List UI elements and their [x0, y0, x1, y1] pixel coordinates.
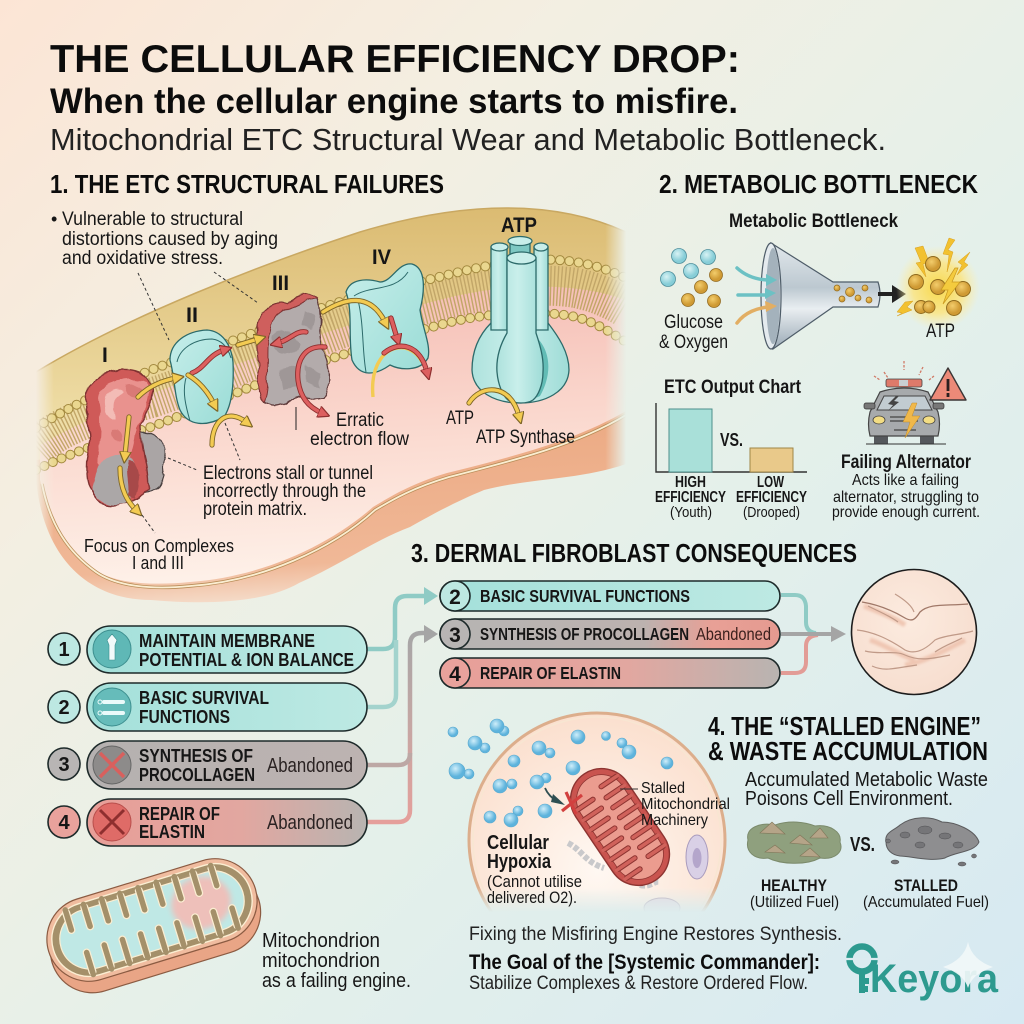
- bar 2: [440, 581, 780, 611]
- leader line: [620, 788, 638, 790]
- label: ATP: ATP: [446, 408, 474, 429]
- icon: wrinkled skin circle: [852, 570, 976, 694]
- arrow: IV red short: [391, 318, 397, 338]
- title: When the cellular engine starts to misfire.: [50, 82, 738, 121]
- label: stalled machinery: Mitochondrial: [641, 796, 730, 813]
- panel: survival priority list: [48, 626, 367, 846]
- panel: failing alternator: [832, 361, 980, 521]
- arrow: I tunnel: [120, 468, 136, 510]
- heading: section 2: 2. METABOLIC BOTTLENECK: [659, 171, 979, 199]
- heading: section 3: 3. DERMAL FIBROBLAST CONSEQUENCES: [411, 540, 857, 568]
- item 2: 2: [58, 697, 70, 719]
- arrow: III erratic: [298, 347, 325, 413]
- item 1: MAINTAIN MEMBRANE: [139, 630, 315, 651]
- text: accumulated waste: Poisons Cell Environment.: [745, 788, 953, 810]
- label: focus on complexes: [84, 536, 234, 573]
- label: erratic electron flow: electron flow: [310, 429, 409, 450]
- label: electrons stall: incorrectly through the: [203, 481, 366, 502]
- protein: Complex II: [170, 330, 233, 423]
- bar 4: REPAIR OF ELASTIN: [480, 663, 621, 683]
- heading: section 1: 1. THE ETC STRUCTURAL FAILURES: [50, 171, 444, 199]
- bar 3: 3: [449, 624, 461, 647]
- protein: Complex I: [86, 370, 167, 506]
- item 3: Abandoned: [267, 755, 353, 777]
- label: healthy: HEALTHY: [761, 876, 828, 895]
- label: ATP synthase: ATP Synthase: [476, 427, 575, 448]
- label: complex III: III: [272, 272, 289, 295]
- illustration: mitochondrion: [36, 848, 271, 1003]
- label: vulnerable text block: Vulnerable to structural: [62, 209, 243, 230]
- title: Mitochondrial ETC Structural Wear and Metabolic Bottleneck.: [50, 122, 886, 157]
- label: complex IV: IV: [372, 246, 391, 269]
- label: vulnerable text block: and oxidative stress.: [62, 248, 223, 269]
- icon: stalled waste: [886, 818, 979, 866]
- logo: Keyora: Keyora: [870, 957, 999, 1001]
- cell body: [468, 712, 726, 910]
- label: electrons stall: protein matrix.: [203, 499, 307, 520]
- text block: provide enough current.: [832, 504, 980, 521]
- label: cellular hypoxia: (Cannot utilise: [487, 873, 582, 891]
- label: erratic electron flow: [310, 410, 409, 450]
- bar 2: 2: [449, 586, 461, 609]
- item 3: [48, 741, 367, 789]
- bar chart: [656, 403, 807, 472]
- item 2: FUNCTIONS: [139, 706, 230, 727]
- label: vulnerable text block: •: [51, 209, 57, 229]
- panel: metabolic bottleneck funnel: [659, 211, 980, 353]
- label: low efficiency: (Drooped): [743, 505, 800, 521]
- ATP burst: [896, 238, 980, 330]
- item 4: REPAIR OF: [139, 803, 220, 824]
- label: healthy: [750, 876, 839, 911]
- panel: ETC output chart: [655, 377, 808, 521]
- protein: Complex III: [257, 294, 329, 430]
- footer text block: Stabilize Complexes & Restore Ordered Flow.: [469, 973, 808, 994]
- label: electrons stall: Electrons stall or tunnel: [203, 463, 373, 484]
- label: cellular hypoxia: delivered O2).: [487, 889, 577, 907]
- bar 4: [440, 658, 780, 688]
- icon: healthy fuel: [747, 822, 841, 863]
- bar 3: Abandoned: [696, 624, 771, 644]
- item 3: 3: [58, 754, 70, 776]
- text block: [832, 472, 980, 521]
- panel: triage bars: [440, 581, 846, 688]
- dashed leader lines: [138, 272, 258, 533]
- label: complex II: II: [186, 304, 198, 327]
- membrane background: [36, 208, 626, 602]
- label: focus on complexes: Focus on Complexes: [84, 536, 234, 556]
- label: vulnerable text block: distortions caused by aging: [62, 229, 278, 250]
- item 4: [48, 799, 367, 846]
- label: high efficiency: EFFICIENCY: [655, 489, 727, 506]
- arrow: ATP synthase: [469, 390, 519, 416]
- bar 3: [440, 619, 780, 649]
- label: mitochondrion: as a failing engine.: [262, 970, 411, 992]
- label: high efficiency: (Youth): [670, 505, 712, 521]
- label: glucose and oxygen: Glucose: [664, 312, 723, 333]
- text block: alternator, struggling to: [833, 489, 979, 506]
- lipid heads upper: [36, 260, 626, 428]
- text: accumulated waste: Accumulated Metabolic Waste: [745, 769, 988, 791]
- label: stalled machinery: Machinery: [641, 812, 708, 829]
- arrow: II curve below: [212, 416, 246, 445]
- label: vs: VS.: [850, 834, 875, 856]
- funnel: [761, 243, 880, 349]
- label: mitochondrion: [262, 930, 411, 992]
- item 4: 4: [58, 812, 70, 834]
- label: high efficiency: [655, 474, 727, 521]
- connector arrows to skin: [781, 595, 846, 673]
- arrow: III to IV: [323, 300, 385, 322]
- arrow: I stalled down: [125, 417, 129, 455]
- label: healthy: (Utilized Fuel): [750, 894, 839, 911]
- heading: Failing Alternator: [841, 452, 971, 473]
- icon: car: [864, 361, 946, 444]
- title: THE CELLULAR EFFICIENCY DROP:: [50, 38, 740, 81]
- label: mitochondrion: mitochondrion: [262, 950, 380, 972]
- label: cellular hypoxia: [487, 832, 582, 907]
- heading: section 4: [708, 711, 988, 766]
- label: low efficiency: [736, 474, 808, 521]
- title: [50, 38, 886, 157]
- item 4: ELASTIN: [139, 821, 205, 842]
- lipid tails: [36, 286, 626, 447]
- panel: waste comparison: [747, 818, 989, 911]
- label: electrons stall: [203, 463, 373, 520]
- item 1: 1: [58, 639, 70, 661]
- icon: red X block: [562, 792, 582, 814]
- label: high efficiency: HIGH: [675, 474, 706, 491]
- label: vulnerable text block: [51, 209, 278, 269]
- illustration: stalled mitochondrion: [559, 757, 681, 897]
- label: ATP output: ATP: [926, 321, 955, 342]
- item 4: Abandoned: [267, 812, 353, 834]
- item 3: PROCOLLAGEN: [139, 764, 255, 785]
- label: stalled: STALLED: [894, 876, 958, 895]
- chart title: ETC Output Chart: [664, 377, 802, 398]
- lipid heads lower: [36, 313, 626, 470]
- subheading: Metabolic Bottleneck: [729, 211, 898, 232]
- protein: Complex IV: [346, 264, 429, 373]
- footer text block: [469, 924, 842, 994]
- arrow: II red: [192, 350, 224, 373]
- panel: ETC membrane illustration: [36, 208, 626, 602]
- label: ATP top: ATP: [501, 214, 537, 237]
- icon: warning triangle: [930, 368, 966, 400]
- footer text block: The Goal of the [Systemic Commander]:: [469, 951, 820, 974]
- item 1: POTENTIAL & ION BALANCE: [139, 649, 354, 670]
- label: low efficiency: EFFICIENCY: [736, 489, 808, 506]
- label: glucose and oxygen: & Oxygen: [659, 332, 728, 353]
- label: cellular hypoxia: Hypoxia: [487, 851, 552, 873]
- arrow: II yellow: [188, 375, 214, 404]
- item 1: [48, 626, 367, 673]
- label: complex I: I: [102, 344, 108, 367]
- protein: ATP synthase: [472, 236, 569, 403]
- label: glucose and oxygen: [659, 312, 728, 353]
- output arrow: [878, 285, 906, 303]
- arrow: II to III: [238, 339, 258, 345]
- label: low efficiency: LOW: [757, 474, 784, 491]
- label: stalled: [863, 876, 989, 911]
- arrow: oxygen blocked: [545, 788, 565, 805]
- bar 2: BASIC SURVIVAL FUNCTIONS: [480, 586, 690, 606]
- text block: Acts like a failing: [852, 472, 959, 489]
- arrow: III internal: [278, 332, 306, 343]
- label: stalled: (Accumulated Fuel): [863, 894, 989, 911]
- label: cellular hypoxia: Cellular: [487, 832, 549, 854]
- label: vs: VS.: [720, 430, 743, 450]
- footer text block: Fixing the Misfiring Engine Restores Synthesis.: [469, 924, 842, 945]
- inputs: glucose and oxygen molecules: [660, 248, 722, 308]
- label: focus on complexes: I and III: [132, 553, 184, 573]
- label: erratic electron flow: Erratic: [336, 410, 384, 431]
- logo: Keyora: [846, 942, 999, 1001]
- panel: cellular hypoxia: [448, 712, 729, 910]
- arrow: I to II: [138, 378, 176, 397]
- oxygen bubbles: [448, 719, 673, 827]
- arrow: IV yellow arc: [373, 348, 422, 397]
- text: accumulated waste: [745, 769, 988, 810]
- label: stalled machinery: Stalled: [641, 780, 685, 797]
- arrow: IV red arc: [384, 346, 427, 372]
- bar 4: 4: [449, 663, 461, 686]
- inflow arrows: [737, 268, 777, 323]
- label: stalled machinery: [641, 780, 730, 829]
- connectors: priority list to triage bars: [367, 587, 438, 822]
- item 2: BASIC SURVIVAL: [139, 687, 269, 708]
- item 2: [48, 683, 367, 731]
- bar 3: SYNTHESIS OF PROCOLLAGEN: [480, 624, 689, 644]
- panel: mitochondrion as failing engine: [36, 848, 411, 1003]
- label: mitochondrion: Mitochondrion: [262, 930, 380, 952]
- item 3: SYNTHESIS OF: [139, 745, 253, 766]
